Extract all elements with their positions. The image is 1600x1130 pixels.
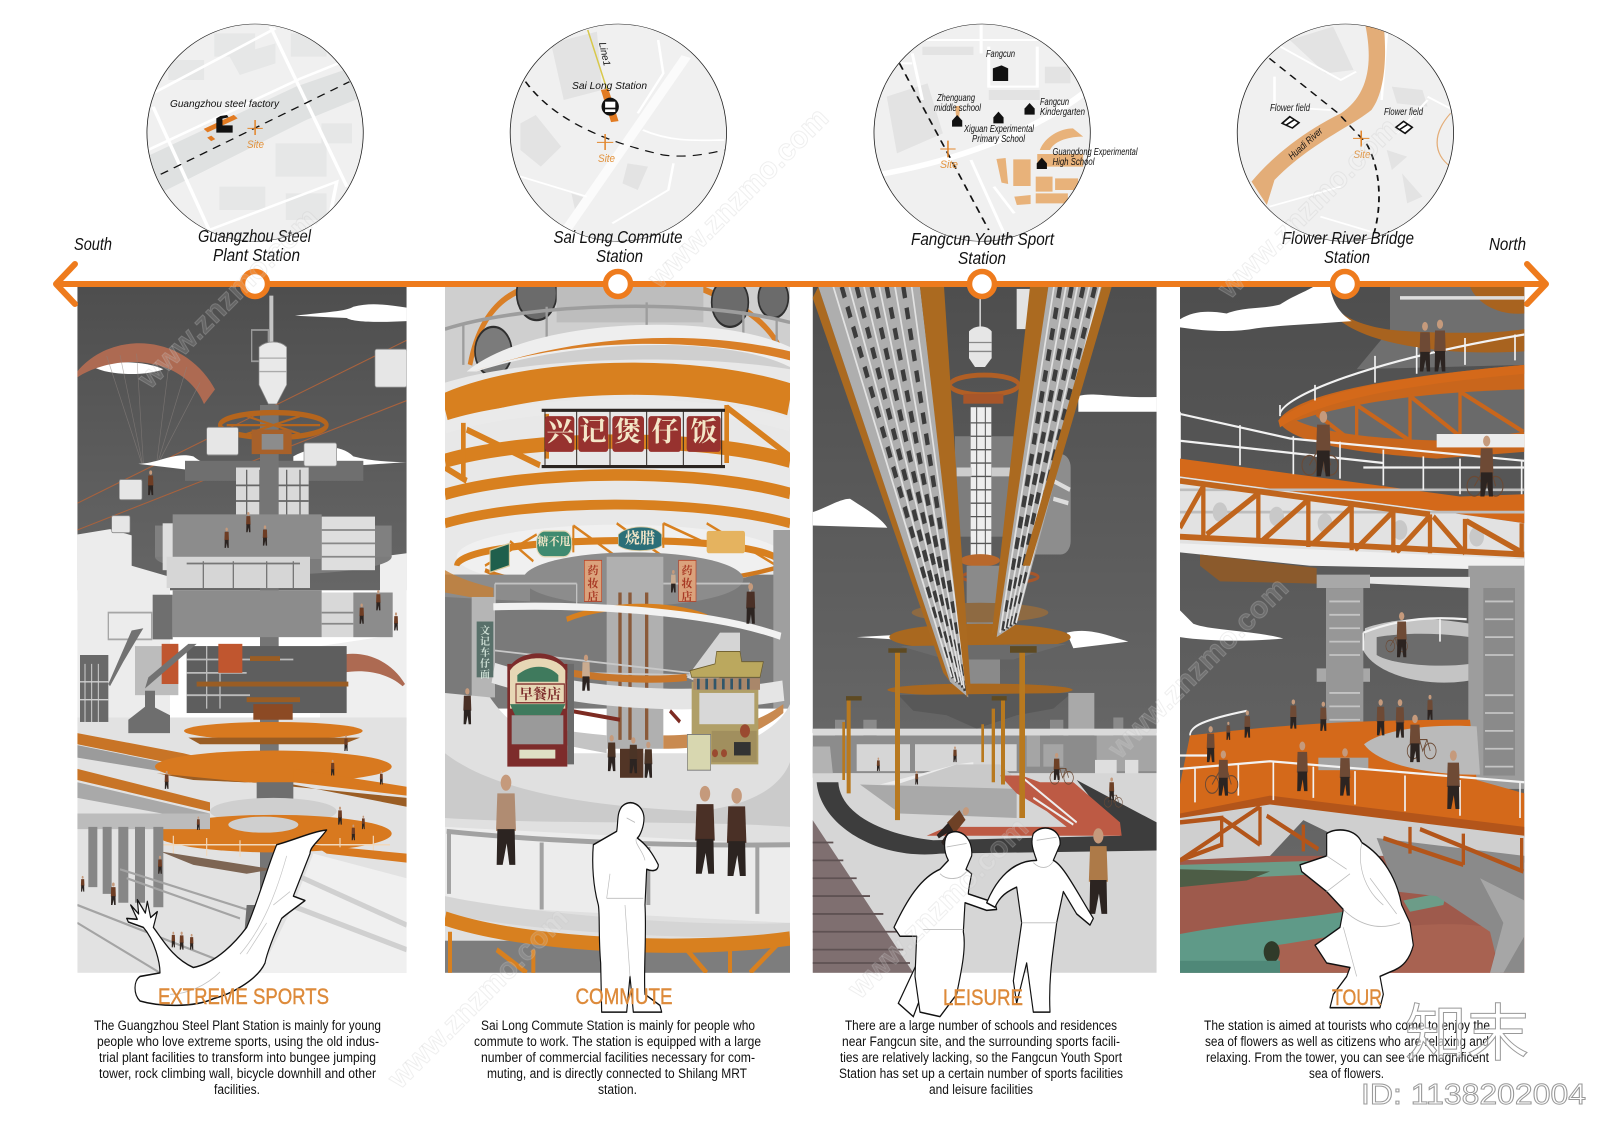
sign lettering: commute panel: 煲 [614,417,642,447]
logo watermark: 知末 [1405,1000,1529,1069]
cafe table group [608,735,652,778]
direction and station labels: South [74,234,112,254]
map labels: Sai Long Station [572,81,647,92]
icons: building and schools [952,65,1047,169]
figure: white line-art photographer [1300,830,1413,1008]
sign board frame [542,410,725,467]
pillars and lower ramps [1364,620,1468,683]
direction and station labels: Flower River Bridge [1282,228,1414,248]
map: Fangcun [871,20,1096,247]
logo watermark: ID: 1138202004 [1361,1079,1586,1111]
panel: commute scene [445,267,790,1012]
marker: site [597,134,613,150]
figure: white line-art running children [894,828,1093,1017]
map labels: Xiguan Experimental [963,124,1035,135]
marker: site [940,141,956,157]
text block: commute: COMMUTE [576,984,672,1009]
direction and station labels: Station [1324,247,1370,267]
direction and station labels: North [1489,234,1526,254]
direction and station labels [74,226,1526,268]
text block: extreme sports: tower, rock climbing wall, bicycle downhill and other [99,1066,376,1081]
map labels: High School [1052,157,1095,168]
watermark marks [131,102,1405,1096]
map labels: Huadi River [1287,126,1326,162]
panel: leisure scene [813,287,1157,1017]
text block: leisure: There are a large number of schools and residences [845,1018,1117,1033]
icons: flower fields [1282,117,1412,133]
map labels: Guangzhou steel factory [170,99,280,110]
watermark marks: www.znzmo.com [1211,112,1405,306]
maps: first two station circles [143,20,730,247]
map: Guangzhou steel factory [143,20,367,247]
panel: tour scene [1180,287,1525,1008]
map labels: Zhenguang [936,93,975,104]
watermark marks: www.znzmo.com [1101,572,1295,766]
map: Sai Long station [505,20,730,247]
map labels: Site [598,153,615,165]
sign lettering: commute panel [480,417,718,702]
text block: leisure: ties are relatively lacking, so the Fangcun Youth Sport [840,1050,1122,1065]
text block: leisure: LEISURE [943,985,1023,1010]
marker: site [247,120,263,135]
sign lettering: commute panel: 仔 [652,417,678,447]
text block: commute [474,984,761,1097]
sign lettering: commute panel: 烧腊 [624,529,655,547]
map labels: Guangdong Experimental [1052,147,1138,158]
text block: commute: commute to work. The station is equipped with a large [474,1034,761,1049]
icon: factory [206,115,236,139]
sign lettering: commute panel: 早餐店 [519,686,561,702]
sign lettering: commute panel: 记 [580,417,606,447]
map: Flower River [1234,20,1458,247]
sign lettering: commute panel: 记 [480,635,490,648]
direction and station labels: Station [596,246,643,266]
map labels [170,41,1423,171]
direction and station labels: Station [958,248,1006,268]
text block: extreme sports: EXTREME SPORTS [158,984,329,1009]
watermark marks: www.znzmo.com [131,202,325,396]
landscape [1180,856,1524,973]
direction and station labels: Fangcun Youth Sport [911,229,1055,249]
maps: last two station circles [871,20,1458,247]
map labels: Kindergarten [1040,107,1085,118]
text block: tour: sea of flowers as well as citizens who are relaxing and [1205,1034,1489,1049]
watermark marks: www.znzmo.com [381,902,575,1096]
map labels: Fangcun [1040,97,1069,108]
sign lettering: commute panel: 药 [682,563,692,577]
text block: leisure: Station has set up a certain number of sports facilities [839,1066,1123,1081]
sign lettering: commute panel: 兴 [546,417,576,447]
direction and station labels: Guangzhou Steel [198,226,312,246]
map labels: Flower field [1384,107,1423,118]
text block: extreme sports: facilities. [214,1082,260,1097]
map labels: Line1 [596,41,612,67]
text block: extreme sports [94,984,381,1097]
icon: metro [602,98,619,116]
text block: tour [1204,985,1490,1081]
map labels: Fangcun [986,49,1015,60]
text block: commute: number of commercial facilities necessary for com- [481,1050,755,1065]
text block: leisure: and leisure facilities [929,1082,1033,1097]
sign lettering: commute panel: 饭 [690,417,718,447]
marker: site [1353,131,1369,147]
sign lettering: commute panel: 药 [588,563,598,577]
text block: extreme sports: The Guangzhou Steel Plant Station is mainly for young [94,1018,381,1033]
figure: white line-art man on phone [593,803,662,1012]
logo watermark [1361,1000,1586,1111]
direction and station labels: Plant Station [213,245,300,265]
text block: extreme sports: people who love extreme sports, using the old indus- [97,1034,379,1049]
sign lettering: commute panel: 仔 [480,657,490,670]
text block: commute: Sai Long Commute Station is mainly for people who [481,1018,755,1033]
map labels: middle school [934,103,982,114]
sign lettering: commute panel: 车 [480,646,490,659]
breakfast stall [507,653,574,767]
sign lettering: commute panel: 糖不甩 [538,534,570,548]
sign lettering: commute panel: 面 [480,668,490,681]
text block: leisure: near Fangcun site, and the surrounding sports facili- [842,1034,1120,1049]
text block: extreme sports: trial plant facilities to transform into bungee jumping [99,1050,376,1065]
text block: commute: muting, and is directly connected to Shilang MRT [487,1066,747,1081]
map labels: Site [1354,149,1370,161]
direction and station labels: Sai Long Commute [554,227,683,247]
text block: tour: The station is aimed at tourists who come to enjoy the [1204,1018,1490,1033]
text block: commute: station. [598,1082,637,1097]
map labels: Site [247,139,264,151]
sign lettering: commute panel: 文 [480,624,490,637]
sign lettering: commute panel: 店 [588,589,598,603]
text block: tour: TOUR [1332,985,1382,1010]
timeline axis with station nodes [56,264,1546,304]
text block: tour: relaxing. From the tower, you can see the magnificent [1206,1050,1489,1065]
panel: extreme sports scene [77,287,407,1005]
sign lettering: commute panel: 妆 [682,576,694,590]
text block: tour: sea of flowers. [1309,1066,1384,1081]
map labels: Flower field [1270,103,1310,114]
map labels: Primary School [972,134,1026,145]
map labels: Site [940,159,958,171]
city and ground [1068,693,1094,736]
sign lettering: commute panel: 妆 [588,576,600,590]
snack stall [687,651,763,770]
cloud: top left of tour panel [1180,287,1352,331]
watermark marks: www.znzmo.com [841,812,1035,1006]
sign lettering: commute panel: 店 [682,589,692,603]
figure: white line-art jumper [127,830,327,1005]
watermark marks: www.znzmo.com [641,102,835,296]
text block: leisure [839,985,1123,1097]
beams [813,287,950,682]
